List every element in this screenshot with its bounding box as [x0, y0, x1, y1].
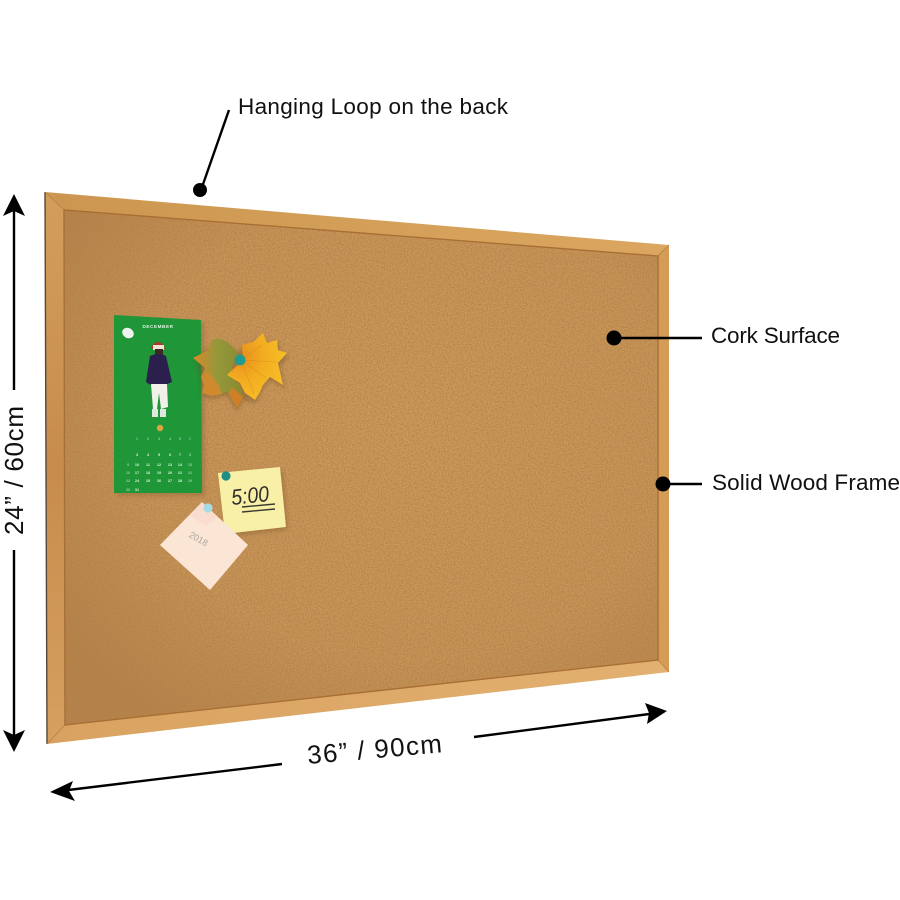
date grid: 18	[146, 471, 150, 475]
cork surface callout: Cork Surface	[711, 323, 840, 348]
date grid: 21	[178, 471, 182, 475]
date grid: 5	[158, 453, 160, 457]
date grid: 3	[136, 453, 138, 457]
cork surface	[64, 210, 658, 725]
date grid: 8	[189, 453, 191, 457]
date grid: 29	[188, 479, 192, 483]
hanging loop callout	[193, 94, 509, 197]
date grid: 10	[135, 463, 139, 467]
date grid: 3	[158, 437, 160, 441]
date grid: 25	[146, 479, 150, 483]
date grid: 7	[179, 453, 181, 457]
date grid: 24	[135, 479, 140, 483]
wood frame	[45, 192, 669, 744]
illustrated figure	[146, 342, 172, 417]
width dimension	[50, 703, 667, 801]
date grid: 14	[178, 463, 183, 467]
date grid: 20	[168, 471, 172, 475]
pink sticky note: 2018	[187, 530, 210, 548]
corkboard	[45, 192, 669, 744]
date grid: 30	[126, 488, 130, 492]
date grid: 28	[178, 479, 182, 483]
date grid: 22	[188, 471, 192, 475]
date grid: 9	[127, 463, 129, 467]
date grid: 31	[135, 488, 139, 492]
yellow sticky note	[218, 467, 288, 537]
solid wood frame callout: Solid Wood Frame	[712, 470, 900, 495]
width dimension: 36” / 90cm	[306, 728, 443, 770]
date grid: 23	[126, 479, 130, 483]
date grid: 4	[169, 437, 172, 441]
left leaf	[193, 338, 243, 408]
cork surface callout	[606, 323, 840, 348]
date grid: 5	[179, 437, 181, 441]
date grid: 1	[136, 437, 138, 441]
maple leaves with pin	[193, 333, 289, 411]
date grid: 26	[157, 479, 161, 483]
yellow sticky note: 5:00	[230, 481, 271, 510]
date grid: 2	[147, 437, 149, 441]
date grid: 19	[157, 471, 161, 475]
hanging loop callout: Hanging Loop on the back	[238, 94, 509, 119]
pin	[203, 503, 213, 513]
date grid: 12	[157, 463, 161, 467]
calendar	[114, 315, 205, 496]
date grid: 15	[188, 463, 192, 467]
date grid: 13	[168, 463, 172, 467]
right leaf	[227, 333, 287, 400]
date grid: 27	[168, 479, 172, 483]
date grid: 6	[169, 453, 171, 457]
calendar: DECEMBER	[142, 324, 174, 329]
date grid: 16	[126, 471, 130, 475]
date grid: 17	[135, 471, 139, 475]
date grid: 4	[147, 453, 150, 457]
date grid: 6	[189, 437, 191, 441]
height dimension	[0, 194, 29, 752]
date grid	[126, 437, 192, 492]
pink sticky note	[160, 502, 248, 590]
pin	[221, 471, 231, 481]
date grid: 11	[146, 463, 150, 467]
